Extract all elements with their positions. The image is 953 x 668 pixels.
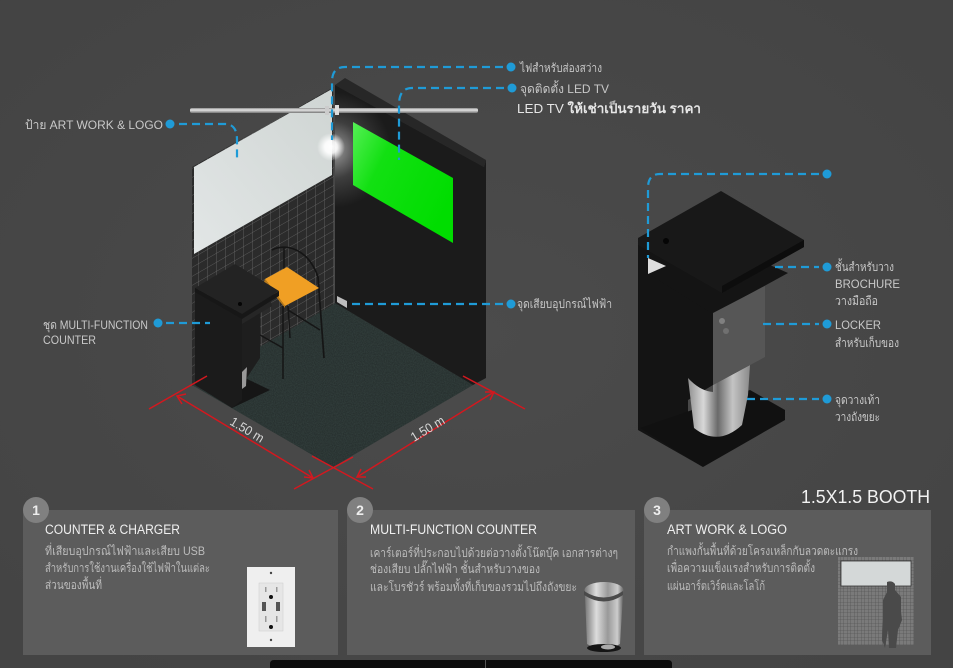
callout: LED TV mount [399, 80, 609, 160]
wall power socket [337, 296, 347, 308]
body text 2 [370, 544, 618, 594]
multi-function counter [195, 264, 279, 408]
panel: artwork and logo [644, 497, 931, 655]
badge 2 [347, 497, 373, 523]
body text 1: ที่เสียบอุปกรณ์ไฟฟ้าและเสียบ USB [45, 542, 205, 559]
callout: multi-function counter: COUNTER [43, 333, 96, 347]
locker door [713, 286, 765, 385]
spot light [317, 133, 345, 161]
badge 1: 1 [32, 502, 40, 518]
callout: locker [763, 318, 899, 350]
callout: counter top [648, 170, 832, 258]
icon: mesh wall with person [838, 557, 914, 648]
callout: power socket: จุดเสียบอุปกรณ์ไฟฟ้า [517, 297, 612, 312]
body text 3: แผ่นอาร์ตเวิร์คและโลโก้ [667, 579, 765, 593]
callout: brochure shelf: วางมือถือ [835, 294, 878, 308]
body text 1 [45, 542, 210, 592]
body text 1: ส่วนของพื้นที่ [45, 576, 102, 592]
heading 1: COUNTER & CHARGER [45, 522, 180, 537]
dimension label left: 1.50 m [227, 414, 267, 446]
mesh grid wall [192, 87, 334, 386]
callout: power socket [352, 297, 612, 312]
lower shelf [640, 390, 785, 467]
badge 3: 3 [653, 502, 661, 518]
floor dimensions [149, 376, 525, 489]
booth illustration [190, 78, 486, 467]
booth size heading: 1.5X1.5 BOOTH [801, 487, 930, 507]
callout: brochure shelf [775, 258, 900, 308]
callout: multi-function counter [43, 318, 210, 347]
callout: brochure shelf: BROCHURE [835, 277, 900, 291]
top board [638, 191, 804, 293]
callout: footrest and bin: จุดวางเท้า [835, 393, 880, 408]
callout: artwork and logo [25, 118, 237, 160]
callout: locker: LOCKER [835, 318, 881, 332]
badge 2: 2 [356, 502, 364, 518]
artwork white panel [194, 89, 332, 254]
LED TV rental note: LED TV ให้เช่าเป็นรายวัน ราคา [517, 99, 701, 116]
badge 1 [23, 497, 49, 523]
callout: lighting: ไฟสำหรับส่องสว่าง [519, 61, 602, 75]
green LED TV screen [353, 122, 453, 243]
panel: counter and charger [23, 497, 338, 655]
panel: multi-function counter [347, 497, 635, 655]
body text 1: สำหรับการใช้งานเครื่องใช้ไฟฟ้าในแต่ละ [45, 559, 210, 575]
body text 2: เคาร์เตอร์ที่ประกอบไปด้วยต่อวางตั้งโน๊ตบุ๊ค เอกสารต่างๆ [370, 544, 618, 561]
callout: multi-function counter: ชุด MULTI-FUNCTION [43, 318, 148, 333]
upper shelf [647, 240, 788, 314]
waste bin [688, 365, 750, 437]
icon: steel pedal bin [584, 582, 624, 652]
heading 3: ART WORK & LOGO [667, 522, 787, 537]
counter detail illustration [638, 191, 804, 467]
orange chair [260, 247, 324, 379]
callout: brochure shelf: ชั้นสำหรับวาง [835, 258, 894, 274]
callout: artwork and logo: ป้าย ART WORK & LOGO [25, 118, 163, 132]
wall glow [335, 100, 382, 200]
body text 3: กำแพงกั้นพื้นที่ด้วยโครงเหล็กกับลวดตะแกรง [667, 542, 858, 558]
right black wall [335, 78, 486, 385]
body text 3 [667, 542, 858, 593]
heading 2: MULTI-FUNCTION COUNTER [370, 522, 537, 537]
light rail [190, 105, 478, 115]
floor carpet [192, 303, 473, 467]
bottom black bar [270, 660, 672, 668]
callout: footrest and bin [747, 393, 880, 424]
badge 3 [644, 497, 670, 523]
counter side wall [638, 238, 713, 467]
dimension label right: 1.50 m [408, 413, 447, 445]
callout: LED TV mount: จุดติดตั้ง LED TV [520, 80, 609, 97]
body text 2: และโบรชัวร์ พร้อมทั้งที่เก็บของรวมไปถึงถังขยะ [370, 578, 577, 594]
callout: footrest and bin: วางถังขยะ [835, 410, 880, 424]
callout: lighting [332, 61, 602, 140]
body text 2: ช่องเสียบ ปลั๊กไฟฟ้า ชั้นสำหรับวางของ [370, 560, 540, 576]
icon: USB wall outlet [247, 567, 295, 647]
corner socket [648, 258, 666, 274]
body text 3: เพื่อความแข็งแรงสำหรับการติดตั้ง [667, 559, 815, 575]
callout: locker: สำหรับเก็บของ [835, 335, 899, 350]
